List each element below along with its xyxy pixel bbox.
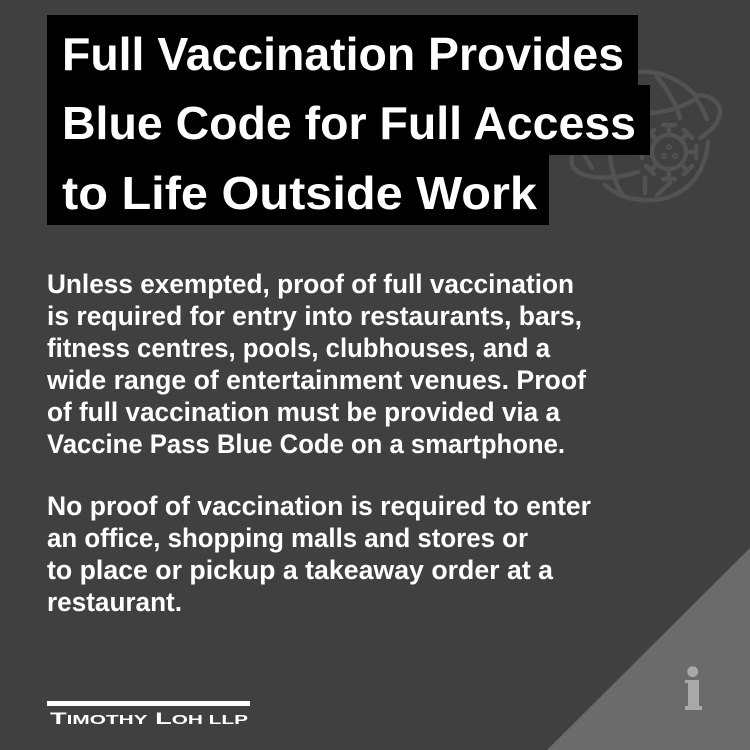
logo wordmark: T IMOTHY L OH LLP [50,709,249,728]
title line 2: Blue Code for Full Access [62,97,636,149]
body paragraph 1: wide range of entertainment venues. Proof [46,365,586,395]
title line 3: to Life Outside Work [62,167,537,219]
title background bars [47,15,650,225]
corner triangle with info icon [547,548,750,750]
body paragraph 1: of full vaccination must be provided via a [47,397,560,427]
body paragraph 2: to place or pickup a takeaway order at a [47,555,553,585]
footer logo [47,701,250,728]
body paragraph 1: Vaccine Pass Blue Code on a smartphone. [47,429,565,459]
body paragraph 2: an office, shopping malls and stores or [47,523,528,553]
icon: info [685,666,702,710]
body paragraph 1 [46,269,586,459]
body paragraph 1: fitness centres, pools, clubhouses, and a [47,333,550,363]
title line 1: Full Vaccination Provides [62,28,624,80]
body paragraph 2 [47,491,591,617]
icon: globe with virus [572,72,720,200]
body paragraph 2: No proof of vaccination is required to enter [47,491,591,521]
body paragraph 1: Unless exempted, proof of full vaccination [47,269,574,299]
body paragraph 1: is required for entry into restaurants, bars, [47,301,582,331]
body paragraph 2: restaurant. [47,587,182,617]
title [47,15,650,225]
